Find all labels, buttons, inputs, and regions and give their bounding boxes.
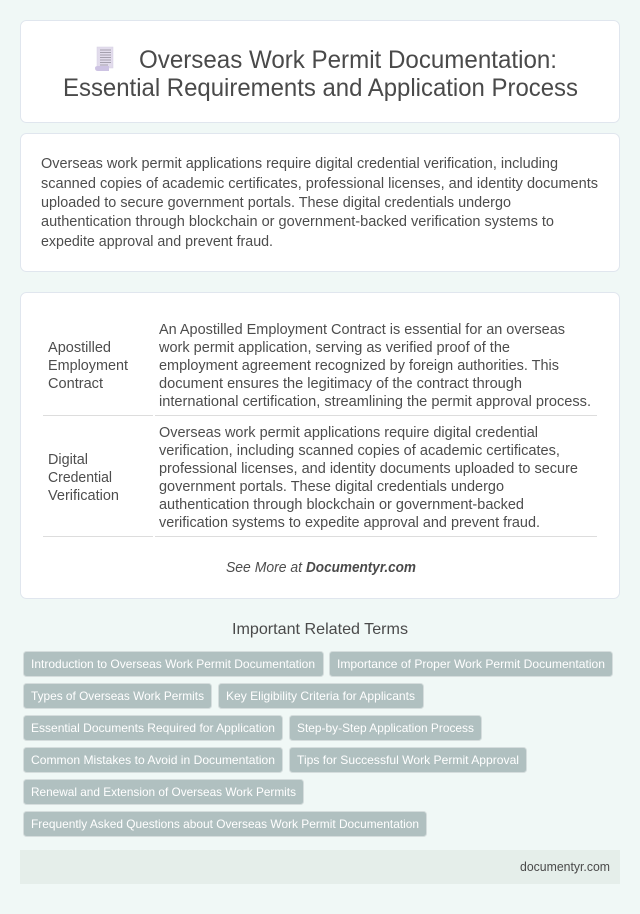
row: digital credential verification: Overseas work permit applications require digital credential — [159, 425, 538, 441]
footer — [20, 850, 620, 884]
intro text — [41, 156, 598, 250]
chip group: related terms: Renewal and Extension of Overseas Work Permits — [31, 785, 296, 799]
row: apostilled employment contract: document ensures the legitimacy of the contract through — [159, 376, 522, 392]
heading: Essential Requirements and Application Process — [63, 74, 578, 102]
chip group: related terms: Essential Documents Required for Application — [31, 721, 275, 735]
row: digital credential verification — [43, 425, 597, 537]
panel: table — [20, 292, 620, 598]
panel: title — [20, 20, 620, 122]
row: apostilled employment contract: employment agreement recognized by foreign authorities. This — [159, 358, 559, 374]
row: apostilled employment contract: An Apostilled Employment Contract is essential for an overseas — [159, 322, 565, 338]
chip group: related terms: Step-by-Step Application Process — [297, 721, 474, 735]
row: apostilled employment contract: work permit application, serving as verified proof of the — [158, 340, 510, 356]
panel: intro — [20, 134, 620, 272]
footer: documentyr.com — [520, 860, 610, 874]
chip group: related terms: Types of Overseas Work Permits — [31, 689, 204, 703]
intro text: uploaded to secure government portals. These digital credentials undergo — [41, 195, 511, 211]
intro text: scanned copies of academic certificates, professional licenses, and identity documents — [41, 176, 598, 192]
row: apostilled employment contract: Apostilled — [48, 340, 111, 356]
chip group: related terms: Introduction to Overseas Work Permit Documentation — [31, 657, 315, 671]
row: digital credential verification: authentication through blockchain or government-backed — [159, 497, 524, 513]
intro text: expedite approval and prevent fraud. — [41, 234, 273, 250]
see more link: Documentyr.com — [306, 560, 416, 576]
intro text: authentication through blockchain or government-backed verification systems to — [41, 214, 554, 230]
row: digital credential verification: Credential — [48, 470, 112, 486]
row: digital credential verification: verification systems to expedite approval and prevent fraud. — [159, 515, 540, 531]
chip group: related terms — [24, 652, 612, 836]
see more link — [226, 560, 416, 576]
chip group: related terms: Common Mistakes to Avoid in Documentation — [31, 753, 275, 767]
row: apostilled employment contract: Contract — [48, 376, 103, 392]
see more link: See More at — [226, 560, 303, 576]
row: digital credential verification: Digital — [48, 452, 88, 468]
chip group: related terms: Key Eligibility Criteria for Applicants — [226, 689, 415, 703]
row: digital credential verification: government portals. These digital credentials undergo — [159, 479, 504, 495]
row: digital credential verification: professional licenses, and identity documents uploaded to secure — [159, 461, 578, 477]
row: apostilled employment contract — [43, 322, 597, 416]
chip group: related terms: Importance of Proper Work Permit Documentation — [337, 657, 605, 671]
row: digital credential verification: verification, including scanned copies of academic certificates, — [159, 443, 560, 459]
row: digital credential verification: Verification — [48, 488, 119, 504]
heading — [63, 46, 578, 102]
heading: Overseas Work Permit Documentation: — [139, 46, 557, 74]
chip group: related terms: Tips for Successful Work Permit Approval — [297, 753, 519, 767]
icon: document scroll — [95, 47, 113, 71]
intro text: Overseas work permit applications require digital credential verification, including — [41, 156, 558, 172]
chip group: related terms: Frequently Asked Questions about Overseas Work Permit Documentation — [31, 817, 419, 831]
row: apostilled employment contract: Employment — [48, 358, 128, 374]
heading: important related terms: Important Related Terms — [232, 621, 408, 638]
row: apostilled employment contract: international certification, streamlining the permit approval process. — [159, 394, 591, 410]
